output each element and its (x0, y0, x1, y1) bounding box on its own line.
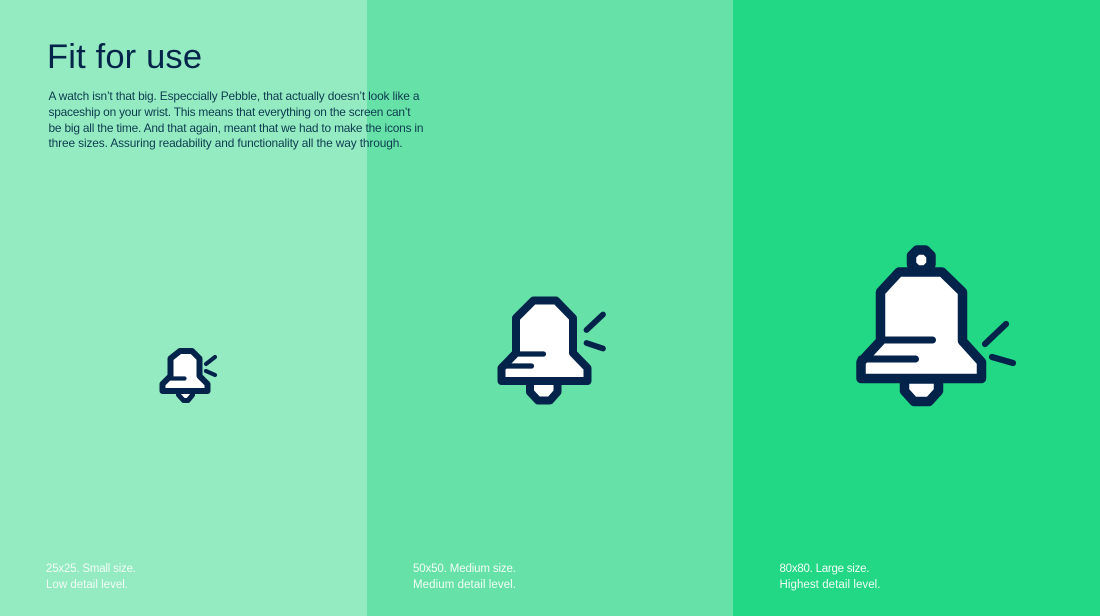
bell detail lines (861, 340, 932, 359)
caption: medium size (413, 563, 516, 591)
panel: large size background (733, 0, 1100, 616)
intro text block: A watch isn’t that big. Especcially Pebble, that actually doesn’t look like a (48, 89, 420, 103)
ring marks (985, 324, 1013, 363)
caption: medium size: 50x50. Medium size. (413, 563, 516, 575)
caption: large size: Highest detail level. (780, 579, 880, 591)
caption: small size: 25x25. Small size. (46, 563, 136, 575)
caption: large size: 80x80. Large size. (780, 563, 870, 575)
icon: medium bell (502, 300, 603, 400)
intro text block: be big all the time. And that again, meant that we had to make the icons in (48, 121, 424, 135)
caption: small size (46, 563, 136, 591)
caption: large size (780, 563, 880, 591)
bell clapper (904, 379, 938, 402)
intro text block: three sizes. Assuring readability and functionality all the way through. (48, 136, 402, 150)
intro text block: spaceship on your wrist. This means that everything on the screen can’t (48, 105, 411, 119)
icon: small bell (162, 351, 215, 400)
panel: small size background (0, 0, 367, 616)
caption: medium size: Medium detail level. (413, 579, 516, 591)
caption: small size: Low detail level. (46, 579, 128, 591)
title: Fit for use (47, 38, 202, 76)
bell loop (912, 250, 931, 270)
panel: medium size background (367, 0, 733, 616)
intro text block (48, 89, 424, 150)
bell body (861, 272, 982, 378)
icon: large bell (861, 250, 1013, 402)
